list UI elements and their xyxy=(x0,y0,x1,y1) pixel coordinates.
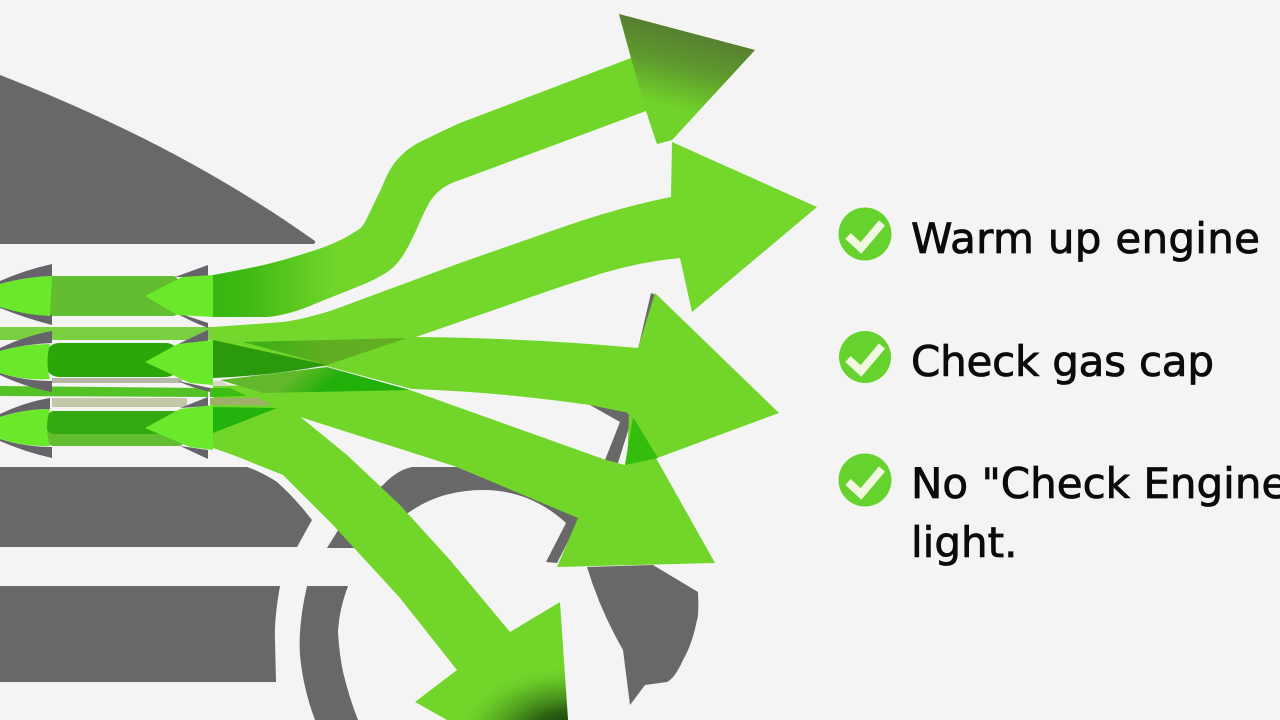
checklist xyxy=(838,208,1280,567)
beige band xyxy=(210,398,272,405)
nozzle crescents xyxy=(0,264,210,459)
arrow: centre xyxy=(213,293,779,465)
nozzles xyxy=(0,264,213,459)
arrow: lower middle xyxy=(213,385,715,567)
band row 4 xyxy=(0,386,208,397)
band row 3 xyxy=(45,343,180,377)
label: check gas cap: Check gas cap xyxy=(911,337,1214,386)
right lenses xyxy=(145,275,213,450)
car: wheel ring xyxy=(300,586,358,720)
icon: check xyxy=(838,208,892,260)
olive wedge xyxy=(243,338,407,365)
car: windshield xyxy=(0,75,315,244)
pale fleck xyxy=(212,381,230,386)
item: check gas cap xyxy=(839,331,1214,386)
arrow: top xyxy=(213,14,755,317)
car: wheel arch xyxy=(327,467,580,563)
icon: check xyxy=(839,331,891,383)
car: door upper xyxy=(0,467,312,547)
band row 2 xyxy=(0,327,213,340)
arrow: lower right xyxy=(213,395,568,720)
item: warm up engine xyxy=(838,208,1260,263)
arrow head shadow xyxy=(415,602,568,720)
label: second line: light. xyxy=(911,518,1017,567)
car: door lower xyxy=(0,586,280,682)
label: warm up engine: Warm up engine xyxy=(911,214,1260,263)
lower wedge xyxy=(220,367,410,393)
thin band xyxy=(210,388,247,397)
arrow: upper xyxy=(213,142,817,341)
car: roof edge xyxy=(638,293,658,350)
car: grille corner xyxy=(590,405,632,463)
band row 3 shadow xyxy=(52,378,182,383)
exhaust bands xyxy=(0,276,213,446)
arrow overlap xyxy=(625,417,658,465)
left lenses xyxy=(0,276,52,446)
label: no check engine light: No "Check Engine xyxy=(911,459,1280,508)
dark wedge xyxy=(213,340,327,378)
overlap shading xyxy=(210,338,410,433)
icon: check xyxy=(838,454,892,506)
item: no check engine light xyxy=(838,454,1280,508)
car silhouette xyxy=(0,75,698,720)
band row 6 xyxy=(46,411,186,446)
band row 1 xyxy=(48,276,178,316)
car: bumper xyxy=(587,565,698,705)
band row 5 xyxy=(52,398,187,407)
lower dark wedge xyxy=(213,407,277,433)
arrow head shading xyxy=(619,14,755,144)
